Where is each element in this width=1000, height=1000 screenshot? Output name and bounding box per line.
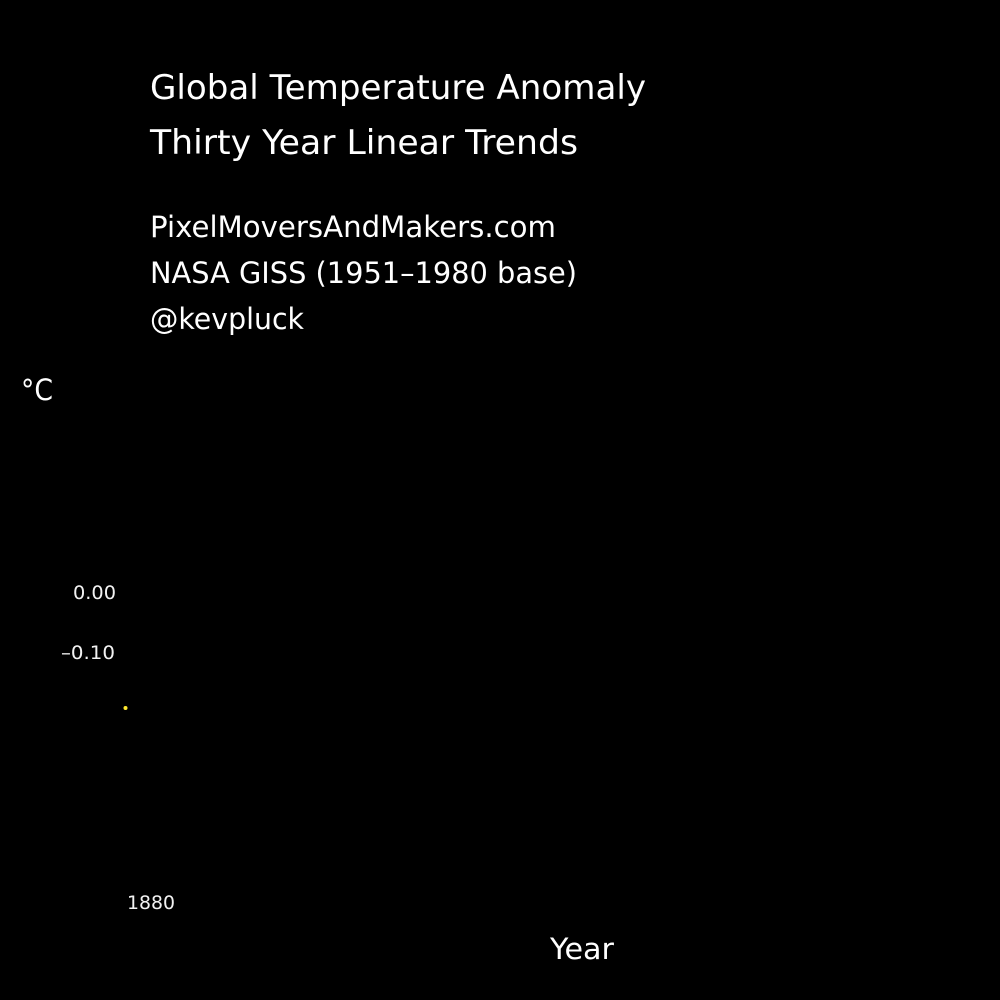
title: Thirty Year Linear Trends [149, 123, 578, 162]
x axis label: Year [549, 932, 615, 966]
credits text block [150, 210, 577, 336]
x axis tick: 1880: 1880 [127, 893, 175, 914]
title [149, 68, 646, 162]
y axis tick: 0.00: 0.00 [73, 583, 116, 604]
title: Global Temperature Anomaly [150, 68, 646, 107]
credits text block: PixelMoversAndMakers.com [150, 210, 556, 244]
y axis tick: -0.10: –0.10 [61, 643, 115, 664]
y axis label: °C [21, 373, 53, 407]
credits text block: NASA GISS (1951–1980 base) [150, 256, 577, 290]
credits text block: @kevpluck [150, 302, 304, 336]
data point [124, 706, 128, 710]
